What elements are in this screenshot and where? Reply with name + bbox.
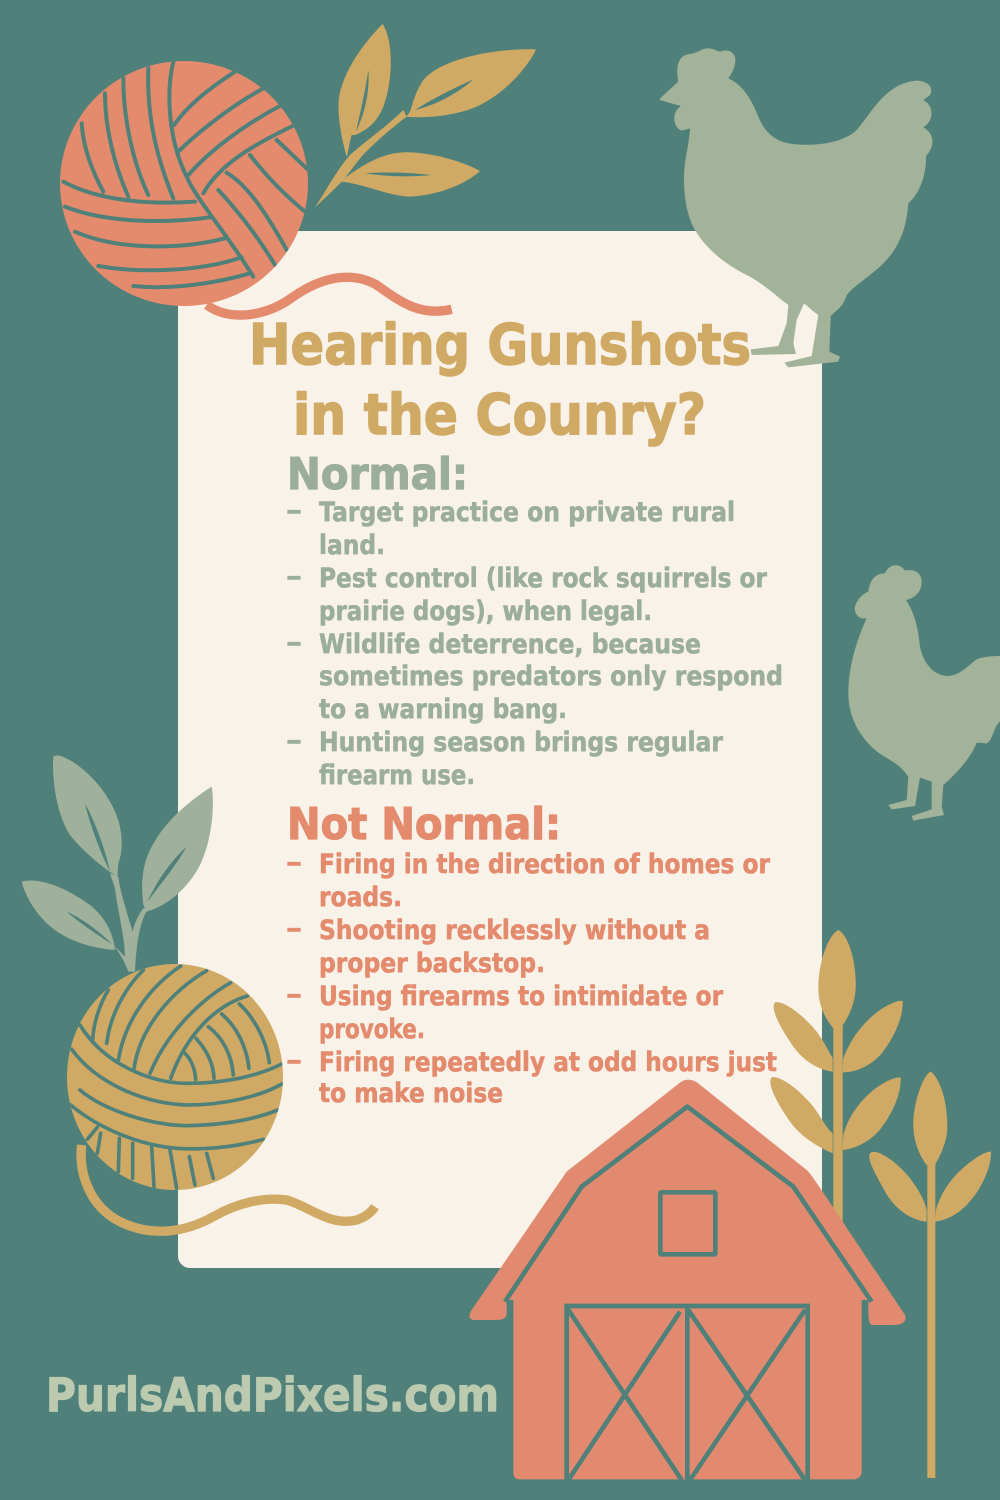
list: normal items: Hunting season brings regular — [319, 727, 724, 758]
list: not normal items: – — [286, 1045, 302, 1076]
heading: normal: Normal: — [287, 449, 468, 500]
list: normal items: prairie dogs), when legal. — [319, 596, 652, 627]
list: not normal items: – — [286, 913, 302, 944]
list: normal items: land. — [319, 530, 385, 561]
footer: website: PurlsAndPixels.com — [46, 1368, 499, 1422]
list: normal items: Wildlife deterrence, because — [319, 629, 701, 660]
icon: sage leaf sprig — [22, 755, 213, 972]
list: not normal items: roads. — [319, 882, 402, 913]
panel: cream card — [178, 231, 822, 1268]
heading: not normal: Not Normal: — [287, 799, 561, 850]
list: not normal items: Shooting recklessly without a — [319, 915, 710, 946]
title: in the Counry? — [293, 383, 706, 448]
icon: mustard yarn ball — [67, 964, 283, 1190]
list: normal items: firearm use. — [319, 760, 475, 791]
icon: coral yarn ball — [60, 61, 308, 306]
icon: mustard yarn strand — [81, 1145, 375, 1231]
icon: mustard leaf sprig top — [315, 24, 536, 207]
list: normal items: sometimes predators only respond — [319, 661, 783, 692]
title — [249, 313, 751, 448]
list: not normal items: proper backstop. — [319, 948, 545, 979]
list: normal items: – — [286, 627, 302, 658]
list: not normal items: Firing in the direction of homes or — [319, 849, 771, 880]
list: not normal items: provoke. — [319, 1014, 425, 1045]
list: not normal items: – — [286, 979, 302, 1010]
list: normal items: – — [286, 495, 302, 526]
icon: barn — [469, 1080, 906, 1481]
list: normal items: – — [286, 561, 302, 592]
list: not normal items: – — [286, 847, 302, 878]
icon: small sage chicken — [848, 565, 1000, 821]
list: normal items: – — [286, 725, 302, 756]
list: not normal items: Using firearms to intimidate or — [319, 981, 724, 1012]
list: not normal items: to make noise — [319, 1078, 503, 1109]
list: normal items — [286, 495, 783, 791]
list: normal items: to a warning bang. — [319, 694, 567, 725]
list: not normal items: Firing repeatedly at odd hours just — [319, 1047, 777, 1078]
list: not normal items — [286, 847, 777, 1109]
icon: wheat stalks — [770, 930, 991, 1478]
section: not normal — [286, 799, 777, 1109]
icon: coral yarn strand — [207, 277, 452, 315]
list: normal items: Pest control (like rock squirrels or — [319, 563, 768, 594]
icon: large sage chicken — [660, 48, 932, 367]
list: normal items: Target practice on private rural — [319, 497, 735, 528]
title: Hearing Gunshots — [249, 313, 751, 378]
section: normal — [286, 449, 783, 791]
